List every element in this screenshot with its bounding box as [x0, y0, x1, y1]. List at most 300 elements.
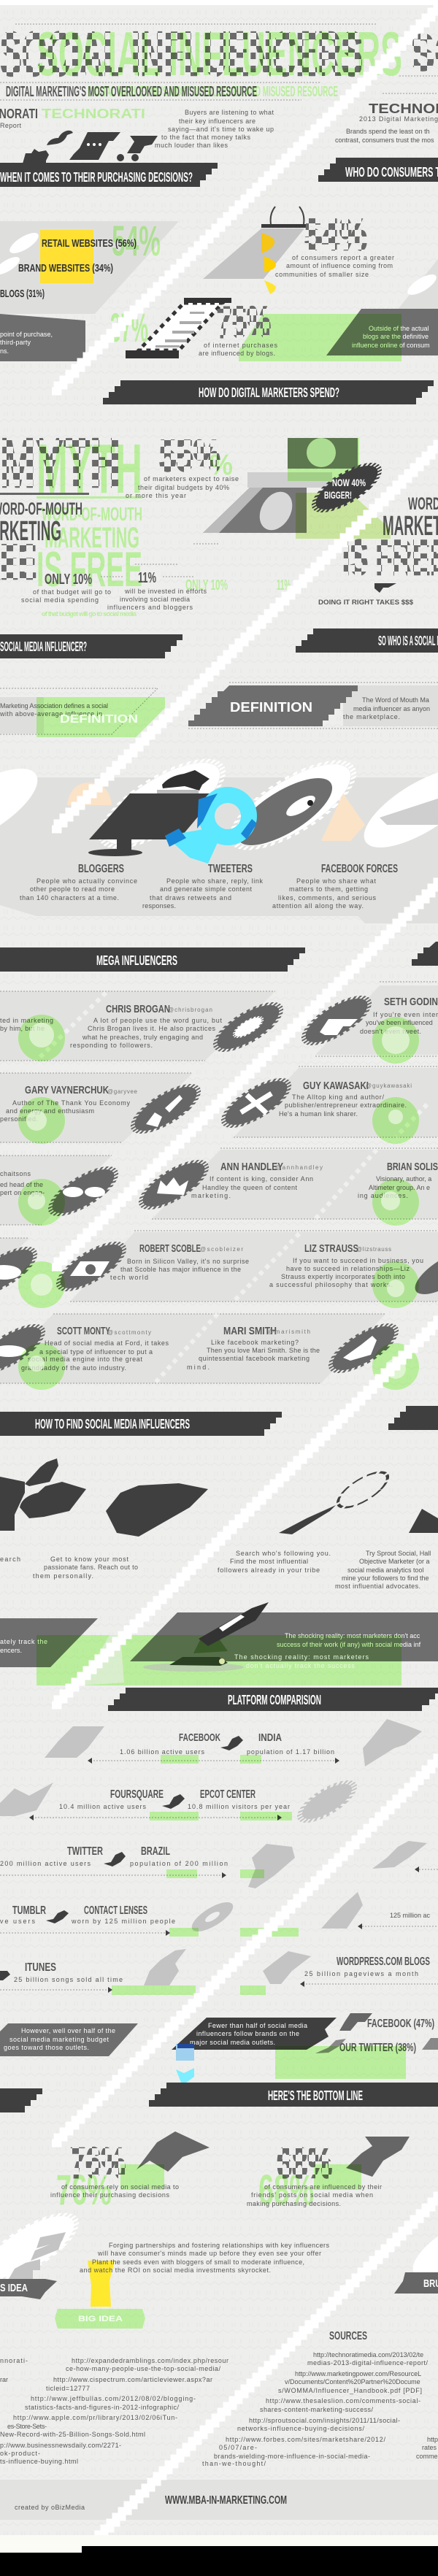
- ghost label: DEFINITION: [60, 713, 138, 726]
- stat caption: amount of influence coming from: [286, 262, 393, 269]
- right source column: 05/07/are-: [219, 2444, 257, 2451]
- icon: facebook: [339, 2013, 372, 2031]
- left source column: rar: [0, 2376, 8, 2383]
- green myth ghost: IS FREE: [36, 542, 142, 597]
- card: robert scoble: [46, 1242, 249, 1289]
- burst callout: BIGGER!: [324, 489, 352, 501]
- caption right: friends' posts on social media when: [251, 2191, 373, 2199]
- card: scott monty: [0, 1325, 169, 1372]
- technorati report block: Report: [0, 122, 21, 129]
- text: how to find steps: most influential advocates.: [335, 1583, 420, 1590]
- comparison: foursquare vs epcot: 10.4 million active users: [59, 1803, 146, 1810]
- green myth ghost: WORD-OF-MOUTH: [42, 503, 142, 525]
- icon: cyan bird: [176, 2068, 194, 2083]
- technorati right: Brands spend the least on th: [346, 128, 430, 135]
- icon: speech bubbles: [346, 2137, 410, 2177]
- text facebook: [272, 877, 377, 910]
- caption 11: involving social media: [120, 596, 190, 603]
- card: scott monty: Head of social media at Ford, it takes: [45, 1339, 169, 1347]
- text: The shocking reality: most marketers don't acc: [285, 1632, 420, 1639]
- section bar: platform comparison: PLATFORM COMPARISION: [228, 1693, 321, 1707]
- text tweeters: responses.: [142, 902, 176, 910]
- caption 11: will be invested in efforts: [124, 588, 207, 595]
- panel: point of purchase: [0, 309, 438, 361]
- comparison: foursquare vs epcot: EPCOT CENTER: [200, 1788, 256, 1801]
- comparison: foursquare vs epcot: [0, 1783, 365, 1820]
- heading bloggers: BLOGGERS: [78, 863, 124, 875]
- footer credit: created by oBizMedia: [15, 2504, 85, 2511]
- burst callout: NOW 40%: [332, 477, 366, 488]
- card: chris brogan: @chrisbrogan: [168, 1007, 212, 1013]
- left source column: ce-how-many-people-use-the-top-social-media/: [66, 2365, 220, 2372]
- burst callout: [301, 465, 392, 510]
- stat 55 percent: [126, 431, 239, 499]
- swirl icons: [0, 233, 438, 295]
- definition text left: [0, 702, 108, 718]
- text: how to find steps: Objective Marketer (or a: [359, 1558, 430, 1565]
- section bar: mega influencers: [0, 942, 438, 972]
- ghost white panel hole: [80, 1635, 124, 1685]
- card: brian solis: Visionary, author, a: [376, 1175, 431, 1183]
- text tweeters: [142, 877, 263, 910]
- technorati ghost: TECHNORATI: [42, 107, 145, 121]
- card: seth godin: doesn't even tweet.: [360, 1028, 421, 1035]
- right source column: rates: [422, 2444, 437, 2451]
- card: liz strauss: have to succeed in relationships—Liz: [286, 1265, 410, 1272]
- heading tweeters: TWEETERS: [208, 863, 253, 875]
- stat caption: [199, 342, 277, 357]
- section bar: so who is a social media influencer: [0, 628, 438, 658]
- left source column: http://expandedramblings.com/index.php/resour: [72, 2357, 228, 2364]
- card: robert scoble: that Scoble has major influence in the: [120, 1266, 241, 1273]
- footer band: [0, 2480, 438, 2520]
- text: 11%: [277, 577, 291, 593]
- yellow block: [40, 230, 93, 283]
- right source column: http://www.forbes.com/sites/marketshare/2012/: [226, 2436, 385, 2443]
- comparison: tumblr vs contact lenses: worn by 125 million people: [71, 1918, 175, 1925]
- card: guy kawasaki: publisher/entrepreneur extraordinaire.: [285, 1101, 407, 1109]
- card: seth godin: [291, 996, 438, 1043]
- panel: fewer than half: major social media outlets.: [190, 2039, 275, 2046]
- left source column: http://www.apple.com/pr/library/2013/02/06iTun-: [13, 2414, 177, 2421]
- icon: bird: [220, 1736, 243, 1750]
- text: encers.: [0, 1647, 22, 1654]
- caption only 10: [21, 588, 111, 604]
- only 10 / 11 percent: 11%: [138, 570, 156, 586]
- card: scott monty: social media engine into the great: [28, 1356, 142, 1363]
- tablet icon and 75 percent: [110, 298, 277, 358]
- myth heading: MYTH: [0, 424, 120, 502]
- ghost text: [234, 1653, 369, 1669]
- comparison: tumblr vs contact lenses: 125 million ac: [390, 1912, 431, 1919]
- quote left: their key influencers are: [179, 118, 256, 125]
- card: gary vaynerchuk: Author of The Thank You Economy: [12, 1099, 130, 1107]
- text: how to find steps: [0, 1550, 431, 1590]
- closing text: and watch the ROI on social media investments skyrocket.: [80, 2267, 271, 2274]
- stat caption: of internet purchases: [204, 342, 277, 349]
- definition banner: [188, 685, 358, 726]
- text tweeters: that draws retweets and: [150, 894, 231, 901]
- retail websites label: RETAIL WEBSITES (56%): [42, 237, 137, 250]
- card: robert scoble: Born in Silicon Valley, it's no surprise: [127, 1258, 249, 1265]
- icon: facebook person disc: [218, 778, 438, 845]
- text: how to find steps: mine your followers to find the: [342, 1575, 429, 1582]
- right source column: http: [427, 2436, 438, 2443]
- stat caption: or more this year: [126, 492, 186, 499]
- comparison: facebook vs india: 1.06 billion active users: [120, 1748, 204, 1756]
- right source column: comme: [416, 2453, 438, 2460]
- card: ann handley: marketing.: [191, 1192, 231, 1199]
- brand websites label: BRAND WEBSITES (34%): [18, 262, 113, 274]
- stat 75%: 75%: [217, 298, 271, 347]
- stat 76%: 76%: [70, 2139, 126, 2187]
- scale icon and 54 percent: [203, 207, 394, 294]
- comparison: itunes vs wordpress: 25 billion pageviews a month: [304, 1970, 418, 1977]
- card: liz strauss: Strauss expertly incorporates both into: [281, 1273, 405, 1280]
- card: gary vaynerchuk: @garyvee: [107, 1088, 138, 1095]
- card: scott monty: @scottmonty: [107, 1329, 151, 1336]
- icons: hand with leaves: [0, 1458, 438, 1537]
- card: mari smith: Like facebook marketing?: [211, 1339, 299, 1346]
- card: liz strauss: a successful philosophy that works.: [269, 1281, 393, 1288]
- text tweeters: People who share, reply, link: [166, 877, 263, 885]
- right source column: than-we-thought/: [202, 2460, 266, 2467]
- green myth ghost: MARKETING: [45, 522, 139, 554]
- ghost text: don't actually track the success: [246, 1662, 355, 1669]
- card: seth godin: If you're even inter: [373, 1011, 438, 1018]
- text: how to find steps: earch: [0, 1556, 20, 1563]
- comparison: tumblr vs contact lenses: TUMBLR: [12, 1904, 46, 1917]
- comparison: twitter vs brazil: TWITTER: [67, 1845, 103, 1858]
- left source column: ts-influence-buying.html: [0, 2458, 78, 2465]
- stat 54%: 54%: [304, 210, 367, 259]
- comparison: tumblr vs contact lenses: [0, 1892, 438, 1937]
- left source column: ticleid=12777: [46, 2385, 90, 2392]
- card: chris brogan: what he preaches, truly engaging and: [82, 1034, 203, 1041]
- comparison: twitter vs brazil: BRAZIL: [141, 1845, 170, 1858]
- right source column: brands-wielding-more-influence-in-social-media-: [214, 2453, 370, 2460]
- card: robert scoble: ROBERT SCOBLE: [139, 1242, 201, 1255]
- comparison: tumblr vs contact lenses: ve users: [0, 1918, 35, 1925]
- caption left: [50, 2183, 179, 2199]
- card: liz strauss: @lizstrauss: [356, 1246, 391, 1253]
- panel: point of purchase: Outside of the actual: [369, 325, 429, 332]
- ghost shapes: [56, 2164, 361, 2214]
- text tweeters: and generate simple content: [160, 885, 252, 893]
- card: chris brogan: responding to followers.: [70, 1042, 153, 1049]
- card: robert scoble: @scobleizer: [200, 1246, 243, 1253]
- card: mari smith: Then you love Mari Smith. She is the: [207, 1347, 320, 1354]
- stat 55 percent: 55%: [159, 431, 220, 480]
- ghost text: The shocking reality: most marketers: [234, 1653, 369, 1661]
- text: how to find steps: Get to know your most: [50, 1556, 128, 1563]
- tablet icon and 75 percent: 37%: [110, 304, 148, 350]
- right source column: http://technoratimedia.com/2013/02/te: [313, 2351, 423, 2358]
- left source column: nnorati-: [0, 2357, 28, 2364]
- text: [0, 1632, 421, 1654]
- icon: blue facebook: [176, 2044, 194, 2061]
- card: liz strauss: LIZ STRAUSS: [304, 1242, 358, 1255]
- section bar: bottom line: HERE'S THE BOTTOM LINE: [268, 2088, 363, 2103]
- card: guy kawasaki: GUY KAWASAKI: [303, 1080, 369, 1092]
- text bloggers: [20, 877, 137, 901]
- comparison: facebook vs india: FACEBOOK: [179, 1731, 220, 1744]
- caption only 10: of that budget will go to: [33, 588, 111, 596]
- quote left: Buyers are listening to what: [185, 109, 274, 116]
- card: ann handley: [128, 1161, 323, 1207]
- header: title and subtitle: [0, 20, 438, 100]
- definition label: DEFINITION: [230, 700, 312, 715]
- card: ann handley: If content is king, consider Ann: [210, 1175, 313, 1183]
- panel: fewer than half: influencers follow brands on the: [196, 2030, 299, 2037]
- stat caption: [126, 475, 239, 499]
- only 10 / 11 percent: ONLY 10%: [45, 572, 92, 588]
- text: how to find steps: Find the most influential: [230, 1558, 308, 1565]
- right source column: http://sproutsocial.com/insights/2011/11/social-: [249, 2417, 400, 2424]
- right banner: [394, 2272, 438, 2294]
- technorati report block: [0, 101, 438, 164]
- left source column: p://www.businessnewsdaily.com/2271-: [0, 2442, 121, 2449]
- panel: fewer than half: Fewer than half of social media: [208, 2022, 307, 2029]
- icon: telescope: [143, 1602, 269, 1672]
- card: brian solis: pert on engag-: [0, 1189, 45, 1196]
- panel: point of purchase: blogs are the definitive: [363, 333, 429, 340]
- card: brian solis: ed head of the: [0, 1181, 43, 1188]
- text: how to find steps: passionate fans. Reach out to: [44, 1564, 138, 1571]
- ghost shapes: 68%: [258, 2166, 314, 2214]
- panel: however over half: social media marketing budget: [9, 2036, 109, 2043]
- left source column: http://www.cispectrum.com/articleviewer.aspx?ar: [53, 2376, 212, 2383]
- green discs: [18, 1015, 419, 1390]
- comparison: twitter vs brazil: 200 million active users: [0, 1860, 91, 1867]
- caption right: [247, 2183, 382, 2207]
- card: mari smith: MARI SMITH: [223, 1325, 277, 1337]
- card: brian solis: Altimeter group. An e: [369, 1184, 430, 1191]
- left source column: New-Record-with-25-Billion-Songs-Sold.html: [0, 2431, 145, 2438]
- icon: megaphone: [137, 2131, 210, 2172]
- text facebook: attention all along the way.: [272, 902, 364, 910]
- doing it right: [318, 583, 413, 606]
- ghost shapes: 76%: [56, 2166, 112, 2214]
- left source column: [0, 2357, 228, 2465]
- card: chris brogan: ted in marketing: [0, 1017, 53, 1024]
- ghosts: ONLY 10%: [185, 577, 228, 593]
- caption left: influence their purchasing decisions: [50, 2191, 169, 2199]
- card: gary vaynerchuk: personified.: [0, 1115, 38, 1123]
- comparison: itunes vs wordpress: [0, 1949, 438, 1995]
- badge: white halos: [0, 761, 438, 848]
- money icon: [203, 438, 392, 539]
- stat caption: of consumers report a greater: [292, 254, 394, 261]
- card: guy kawasaki: @guykawasaki: [366, 1083, 412, 1089]
- sources heading: SOURCES: [329, 2330, 367, 2342]
- definition text left: Marketing Association defines a social: [0, 702, 108, 710]
- icons: bird, hat, speech, cart: [23, 131, 158, 164]
- right source column: http://www.thesaleslion.com/comments-social-: [266, 2397, 420, 2404]
- right source column: http://www.marketingpower.com/ResourceL: [295, 2370, 421, 2377]
- stat caption: communities of smaller size: [275, 271, 369, 278]
- section bar: who do consumers trust: [0, 158, 438, 187]
- text bloggers: other people to read more: [30, 885, 115, 893]
- card: ann handley: @annhandley: [275, 1164, 323, 1171]
- closing text: [80, 2242, 329, 2274]
- card: chris brogan: A lot of people use the word guru, but: [93, 1017, 222, 1024]
- comparison: facebook vs india: population of 1.17 billion: [247, 1748, 334, 1756]
- section bar: platform comparison: [108, 1688, 438, 1711]
- footer url: WWW.MBA-IN-MARKETING.COM: [165, 2494, 287, 2507]
- section bar: how do digital marketers spend: [103, 380, 434, 404]
- quote left: saying—and it's time to wake up: [168, 126, 274, 133]
- left source column: statistics-facts-and-figures-in-2012-infographic/: [25, 2404, 179, 2411]
- stats: bottom line: [50, 2131, 410, 2214]
- section bar: who do consumers trust: WHEN IT COMES TO THEIR PURCHASING DECISIONS?: [0, 170, 193, 185]
- right stub: [422, 2038, 438, 2050]
- section bar: how to find: HOW TO FIND SOCIAL MEDIA INFLUENCERS: [35, 1417, 190, 1431]
- technorati right: contrast, consumers trust the mos: [335, 137, 434, 144]
- panel: sites trusted: [0, 218, 438, 314]
- right source column: v/Documents/Content%20Partner%20Docume: [285, 2378, 420, 2385]
- section bar: mega influencers: MEGA INFLUENCERS: [96, 953, 177, 968]
- ghosts: of that budget will go to social media: [42, 610, 137, 618]
- definition text right: The Word of Mouth Ma: [362, 696, 429, 704]
- text: how to find steps: Search who's following you.: [236, 1550, 331, 1557]
- definition text right: [343, 696, 430, 720]
- panel: however over half: However, well over half of the: [21, 2027, 115, 2034]
- green ghost panel: [36, 1635, 402, 1685]
- card: guy kawasaki: The Alltop king and author/: [292, 1093, 384, 1101]
- sources: [0, 2330, 438, 2467]
- closing text: Forging partnerships and fostering relationships with key influencers: [109, 2242, 329, 2249]
- big idea: [0, 2215, 438, 2329]
- green banner: [55, 2309, 145, 2329]
- caption left: of consumers rely on social media to: [61, 2183, 179, 2191]
- card: ann handley: ANN HANDLEY: [220, 1161, 283, 1173]
- definition text right: the marketplace.: [343, 713, 400, 720]
- green ghost panel: [239, 314, 402, 361]
- card: brian solis: chaitsons: [0, 1170, 31, 1177]
- definition text left: with above-average influence in: [0, 710, 102, 718]
- closing text: Plant the seeds even with bloggers of small to moderate influence,: [92, 2258, 304, 2266]
- panel: shocking reality: [0, 1602, 438, 1685]
- text facebook: likes, comments, and serious: [278, 894, 377, 901]
- card: robert scoble: tech world: [110, 1274, 148, 1281]
- green myth ghost: MYTH: [36, 430, 142, 508]
- green ghost money: [288, 438, 359, 481]
- right source column: networks-influence-buying-decisions/: [237, 2425, 364, 2432]
- closing text: will have consumer's minds made up before they even see your offer: [97, 2250, 321, 2257]
- icon: bird: [46, 1910, 69, 1923]
- text: how to find steps: Try Sprout Social, Hall: [366, 1550, 431, 1557]
- comparison: facebook vs india: INDIA: [258, 1731, 282, 1744]
- right source column: medias-2013-digital-influence-report/: [307, 2359, 428, 2367]
- panel: point of purchase: ns.: [0, 347, 9, 355]
- text: how to find steps: followers already in your tribe: [218, 1566, 320, 1574]
- card: gary vaynerchuk: and energy and enthusiasm: [6, 1107, 94, 1115]
- comparison: twitter vs brazil: [0, 1841, 438, 1888]
- gray bulb: [9, 2232, 66, 2279]
- stat 68%: 68%: [277, 2139, 332, 2187]
- caption right: of consumers are influenced by their: [264, 2183, 382, 2191]
- card: scott monty: SCOTT MONTY: [57, 1325, 110, 1337]
- caption right: making purchasing decisions.: [247, 2200, 341, 2207]
- comparison: facebook vs india: [45, 1719, 422, 1766]
- definition text right: media influencer as anyon: [353, 705, 430, 712]
- green myth ghost: [36, 430, 142, 597]
- panel: definition: [0, 683, 438, 737]
- card: brian solis: [0, 1161, 438, 1214]
- text: how to find steps: them personally.: [33, 1572, 93, 1580]
- right source column: [202, 2351, 438, 2467]
- text facebook: matters to them, getting: [289, 885, 368, 893]
- card: chris brogan: CHRIS BROGAN: [106, 1003, 170, 1015]
- panel: point of purchase: influence online of consum: [352, 342, 430, 349]
- left source column: ok-product-: [0, 2450, 40, 2457]
- comparison: foursquare vs epcot: 10.8 million visitors per year: [188, 1803, 290, 1810]
- text: how to find steps: social media analytics tool: [347, 1566, 424, 1574]
- quote left: [155, 109, 274, 149]
- right source column: shares-content-marketing-success/: [260, 2406, 373, 2413]
- stat caption: of marketers expect to raise: [144, 475, 239, 482]
- blogs label: BLOGS (31%): [0, 288, 45, 300]
- card: liz strauss: If you want to succeed in business, you: [293, 1257, 423, 1264]
- card: gary vaynerchuk: GARY VAYNERCHUK: [25, 1084, 109, 1096]
- card: liz strauss: [0, 1242, 438, 1294]
- panel: point of purchase: point of purchase,: [0, 331, 53, 338]
- card: mari smith: mind.: [187, 1364, 210, 1371]
- text bloggers: than 140 characters at a time.: [20, 894, 119, 901]
- panel: however over half: [0, 2023, 138, 2056]
- ghost percent: 54%: [112, 218, 161, 265]
- only 10 / 11 percent: [21, 544, 291, 618]
- panel: however over half: goes toward those outlets.: [4, 2044, 89, 2051]
- left source column: es-Store-Sets-: [7, 2423, 47, 2430]
- section bar: bottom line: [0, 2083, 438, 2112]
- section bar: so who is a social media influencer: SOCIAL MEDIA INFLUENCER?: [0, 639, 87, 654]
- comparison: itunes vs wordpress: ITUNES: [25, 1961, 56, 1974]
- comparison: itunes vs wordpress: 25 billion songs sold all time: [14, 1976, 123, 1983]
- card: seth godin: you've been influenced: [366, 1019, 433, 1026]
- card: chris brogan: Chris Brogan lives it. He also practices: [88, 1025, 216, 1032]
- card: chris brogan: by him, but he: [0, 1025, 45, 1032]
- green ghost panel: [36, 697, 165, 737]
- panel: mega influencer cards: [0, 982, 438, 1390]
- icon: twitter: [315, 2039, 346, 2053]
- yellow bulb: [88, 2261, 115, 2307]
- section bar: how to find: [0, 1406, 438, 1436]
- card: gary vaynerchuk: [0, 1084, 211, 1131]
- big idea: S IDEA: [0, 2282, 28, 2294]
- card: guy kawasaki: [211, 1080, 412, 1126]
- icon: twitter ring: [165, 793, 257, 864]
- card: mari smith: quintessential facebook marketing: [199, 1355, 310, 1362]
- technorati right: [335, 101, 438, 144]
- stat 55 percent: %: [210, 449, 233, 481]
- stat caption: [275, 254, 394, 278]
- icon: blogger: [67, 770, 218, 856]
- comparison: tumblr vs contact lenses: CONTACT LENSES: [84, 1904, 147, 1917]
- doing it right: DOING IT RIGHT TAKES $$$: [318, 599, 413, 606]
- left source column: http://www.jeffbullas.com/2012/08/02/blogging-: [31, 2395, 196, 2402]
- ghosts: [42, 577, 291, 618]
- quote left: much louder than likes: [155, 142, 228, 149]
- banner: [0, 2279, 57, 2299]
- panel: influencer types: [0, 761, 438, 923]
- caption 11: influencers and bloggers: [107, 604, 193, 611]
- caption only 10: social media spending: [21, 596, 99, 604]
- panel: point of purchase: third-party: [0, 339, 31, 346]
- panel: fewer than half: [172, 2013, 438, 2083]
- text: ately track the: [0, 1638, 47, 1645]
